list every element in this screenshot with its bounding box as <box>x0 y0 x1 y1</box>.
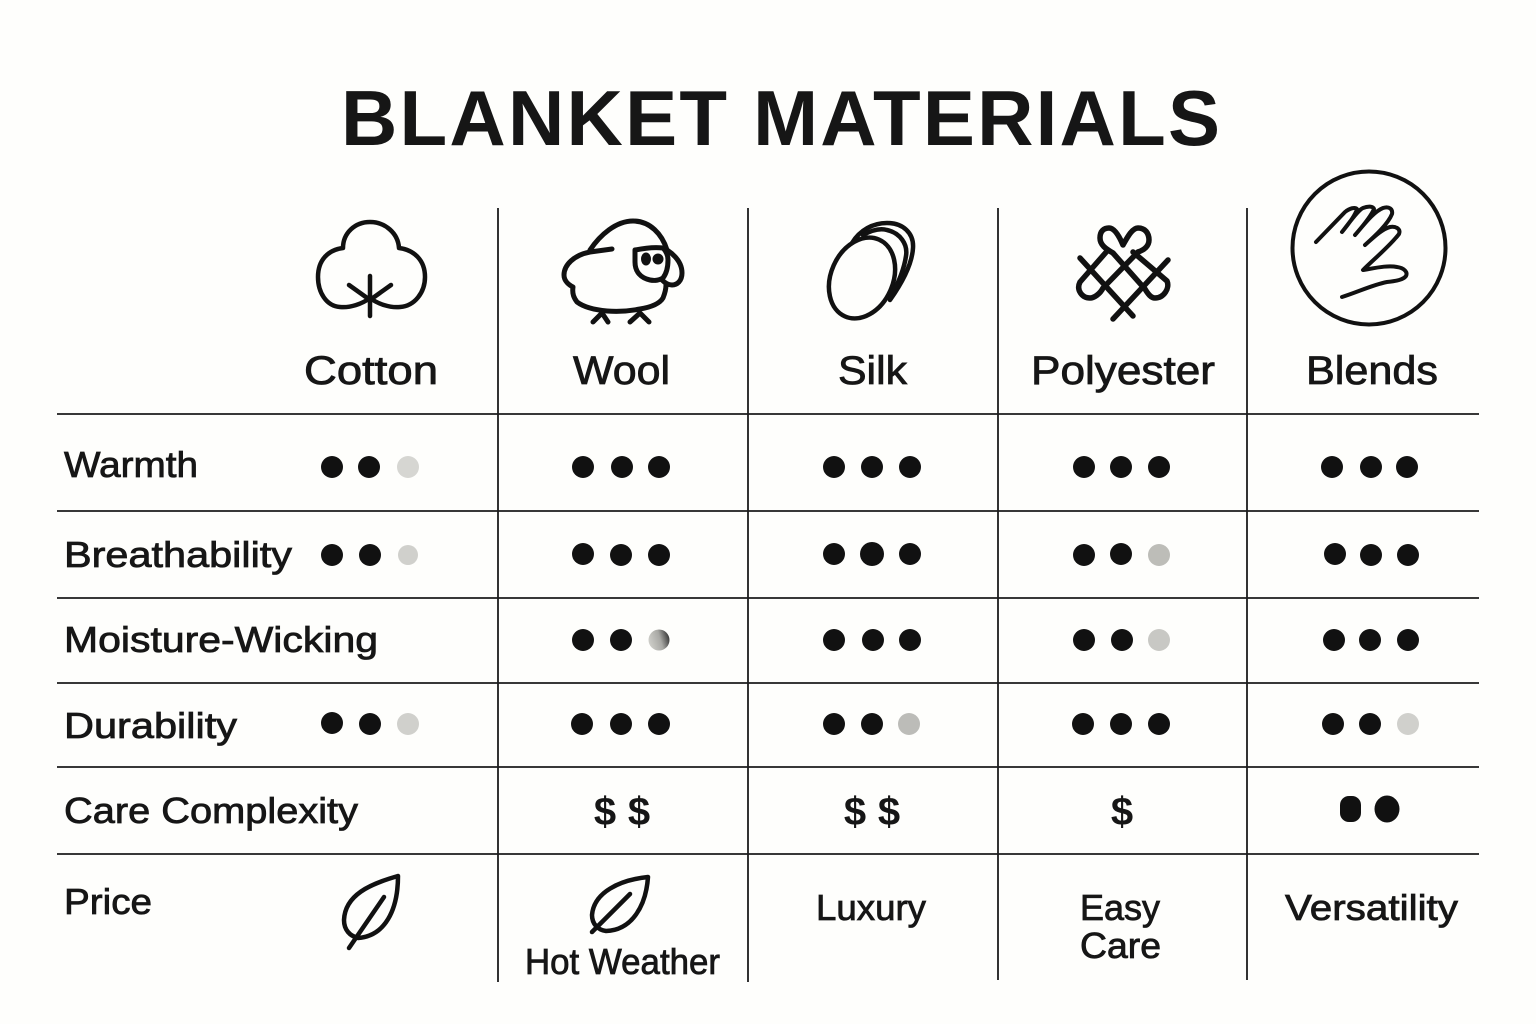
best-for labels: Hot Weather <box>525 941 720 982</box>
price symbols: $ <box>594 790 616 834</box>
best-for labels: Versatility <box>1285 887 1458 928</box>
rating dots <box>321 456 1419 822</box>
material headers <box>304 349 1438 393</box>
material headers: Cotton <box>304 349 438 393</box>
price symbols: $ <box>628 790 650 834</box>
price symbols: $ <box>878 790 900 834</box>
icon: sheep <box>564 221 682 322</box>
icon: leaf cotton <box>344 876 398 948</box>
comparison table grid <box>57 208 1479 982</box>
best-for labels <box>525 887 1458 982</box>
material headers: Blends <box>1306 349 1438 393</box>
row labels: Care Complexity <box>64 790 359 831</box>
best-for labels: Care <box>1080 925 1161 966</box>
price symbols: $ <box>1111 790 1133 834</box>
material headers: Wool <box>573 349 670 393</box>
row labels: Breathability <box>64 534 293 575</box>
price symbols <box>594 790 1133 834</box>
row labels: Price <box>64 881 152 922</box>
row labels: Warmth <box>64 444 198 485</box>
icon: leaf wool <box>592 877 648 932</box>
best-for labels: Easy <box>1080 887 1160 928</box>
best-for labels: Luxury <box>816 887 926 928</box>
row labels: Moisture-Wicking <box>64 619 378 660</box>
icon: cotton <box>318 222 425 316</box>
title: BLANKET MATERIALS <box>341 74 1220 162</box>
icon: polyester weave <box>1079 228 1168 319</box>
price symbols: $ <box>844 790 866 834</box>
icon: silk <box>817 223 913 329</box>
material headers: Silk <box>838 349 907 393</box>
row labels <box>64 444 378 922</box>
row labels: Durability <box>64 705 238 746</box>
icon: hand in circle <box>1292 172 1446 324</box>
material headers: Polyester <box>1031 349 1215 393</box>
